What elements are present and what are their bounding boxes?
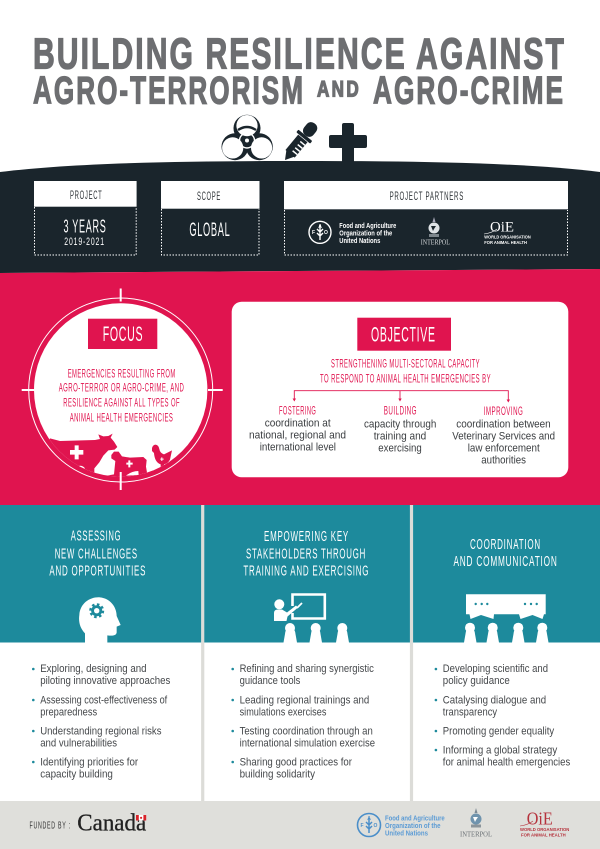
logo: INTERPOL [421, 217, 450, 246]
column 2 bullets: Sharing good practices for [240, 757, 352, 769]
column 1 bullets: capacity building [40, 769, 113, 781]
column 1 bullets: and vulnerabilities [40, 738, 118, 750]
column 2 bullets: Refining and sharing synergistic [240, 663, 374, 675]
column 1: assessing [32, 529, 171, 781]
column 2 bullets: Testing coordination through an [240, 726, 373, 738]
footer background [0, 801, 600, 849]
focus text: RESILIENCE AGAINST ALL TYPES OF [63, 396, 180, 410]
column 3 bullets [435, 663, 571, 769]
column 1 bullets: preparedness [40, 706, 98, 718]
column: fostering: national, regional and [249, 430, 346, 442]
focus text: EMERGENCIES RESULTING FROM [68, 366, 176, 380]
icon: trainer and audience [274, 594, 349, 642]
column: fostering: coordination at [265, 418, 331, 430]
focus heading: FOCUS [103, 323, 143, 346]
column 1 heading: NEW CHALLENGES [55, 546, 138, 562]
column 1 heading: AND OPPORTUNITIES [49, 564, 146, 580]
column 2 bullets: guidance tools [240, 675, 301, 687]
column 2 bullets: international simulation exercise [240, 738, 375, 750]
column 2 bullets: Leading regional trainings and [240, 694, 369, 706]
panel: project: 2019-2021 [64, 236, 105, 248]
column: improving: IMPROVING [484, 404, 523, 418]
focus text [59, 366, 184, 425]
column 2 bullets: building solidarity [240, 769, 315, 781]
icon: medical cross [329, 123, 367, 163]
focus target ring [22, 288, 223, 482]
footer logo: INTERPOL: INTERPOL [460, 830, 492, 839]
footer logo: OIE: FOR ANIMAL HEALTH [521, 833, 566, 839]
panel: project: PROJECT [70, 188, 102, 202]
column: fostering: international level [260, 442, 336, 454]
logo: FAO: F [312, 230, 315, 236]
column: fostering: FOSTERING [279, 403, 316, 417]
logo: OIE [484, 220, 531, 245]
column 2 heading [243, 529, 369, 580]
column 3 bullets: for animal health emergencies [443, 757, 571, 769]
logo: FAO [309, 221, 396, 245]
footer logo: FAO: Food and Agriculture [385, 814, 445, 822]
focus text: ANIMAL HEALTH EMERGENCIES [70, 411, 173, 425]
column 3 bullets: policy guidance [443, 675, 510, 687]
logo: OIE: WORLD ORGANISATION [484, 235, 531, 240]
column 2 heading: EMPOWERING KEY [264, 529, 349, 545]
footer logo: FAO: Organization of the [385, 821, 440, 830]
title [33, 30, 566, 112]
column: fostering [249, 403, 346, 454]
column: improving: law enforcement [468, 442, 540, 454]
logo: FAO: United Nations [339, 238, 380, 245]
title: AND [317, 77, 361, 102]
column 1 bullets: Exploring, designing and [40, 663, 147, 675]
footer logo: OIE: OiE [527, 808, 553, 828]
column 2 bullets [231, 663, 375, 781]
panel: scope: GLOBAL [189, 219, 230, 241]
objective heading [357, 318, 451, 351]
footer logo: OIE: WORLD ORGANISATION [520, 827, 570, 833]
column: building [364, 404, 436, 454]
pink section background [0, 269, 600, 505]
column 3 bullets: Catalysing dialogue and [443, 694, 546, 706]
column 2 heading: TRAINING AND EXERCISING [243, 564, 369, 580]
column 2: empowering [231, 529, 375, 781]
panel: project partners: PROJECT PARTNERS [390, 189, 464, 203]
illustration: livestock [50, 434, 172, 477]
logo: FAO: A [318, 224, 322, 230]
footer logo: OIE [520, 808, 570, 839]
footer: funded by [30, 811, 147, 837]
column: improving: authorities [481, 455, 526, 467]
logo: FAO: Organization of the [339, 230, 392, 238]
objective heading: OBJECTIVE [371, 324, 436, 347]
icon: canada flag [136, 815, 146, 820]
column 3 bullets: Developing scientific and [443, 663, 548, 675]
panel: focus [22, 288, 223, 495]
column 1 bullets: Assessing cost-effectiveness of [40, 694, 168, 706]
panel: scope: SCOPE [197, 189, 221, 203]
logo: FAO: Food and Agriculture [339, 223, 396, 230]
column 2 bullets: simulations exercises [240, 706, 327, 718]
teal band [0, 505, 600, 642]
column 1 heading: ASSESSING [71, 529, 121, 545]
column: building: capacity through [364, 418, 436, 430]
logo: OIE: OiE [490, 220, 514, 236]
logo: INTERPOL: INTERPOL [421, 238, 450, 246]
logo: FAO: O [324, 230, 328, 236]
panel: project: 3 YEARS [64, 216, 106, 236]
column: building: exercising [378, 442, 422, 454]
panel: project [34, 181, 137, 255]
footer logo: FAO: O [374, 823, 378, 829]
dark header band [0, 161, 600, 273]
column 1 bullets: piloting innovative approaches [40, 675, 171, 687]
column 1 bullets: Understanding regional risks [40, 726, 162, 738]
column 1 bullets: Identifying priorities for [40, 757, 138, 769]
objective subtitle [320, 357, 491, 385]
focus bottom tick [120, 472, 122, 490]
footer: funded by: FUNDED BY : [30, 820, 71, 831]
column: building: BUILDING [384, 404, 417, 418]
title: AGRO-TERRORISM [33, 69, 305, 112]
icon: head with gear [79, 597, 121, 643]
column: improving: coordination between [456, 418, 551, 430]
panel: project partners [284, 181, 568, 255]
panel: objective [232, 302, 568, 477]
focus text: AGRO-TERROR OR AGRO-CRIME, AND [59, 381, 184, 395]
footer logo: FAO [358, 814, 445, 838]
footer logo: FAO: A [367, 816, 371, 822]
column 3 bullets: Promoting gender equality [443, 726, 555, 738]
panel: scope [161, 181, 260, 255]
footer logo: FAO: F [360, 823, 364, 829]
column 3: coordination [435, 537, 571, 769]
column 1 heading [49, 529, 146, 580]
icon: biohazard [222, 115, 273, 160]
footer logo: INTERPOL [460, 808, 492, 839]
column 3 bullets: transparency [443, 706, 498, 718]
footer: funded by: Canada [77, 811, 147, 837]
logo: OIE: FOR ANIMAL HEALTH [484, 240, 527, 245]
icon: dropper [278, 118, 322, 166]
icon: speech bubble and audience [464, 594, 548, 642]
footer logo: FAO: United Nations [385, 828, 428, 838]
focus heading [88, 319, 157, 349]
column: building: training and [374, 430, 426, 442]
column 3 heading: COORDINATION [470, 537, 541, 553]
connector arrows [293, 391, 510, 402]
column 2 heading: STAKEHOLDERS THROUGH [246, 546, 366, 562]
column 1 bullets [32, 663, 171, 781]
column 3 bullets: Informing a global strategy [443, 744, 558, 756]
column: improving: Veterinary Services and [452, 430, 555, 442]
column 3 heading [454, 537, 558, 570]
column: improving [452, 404, 555, 467]
